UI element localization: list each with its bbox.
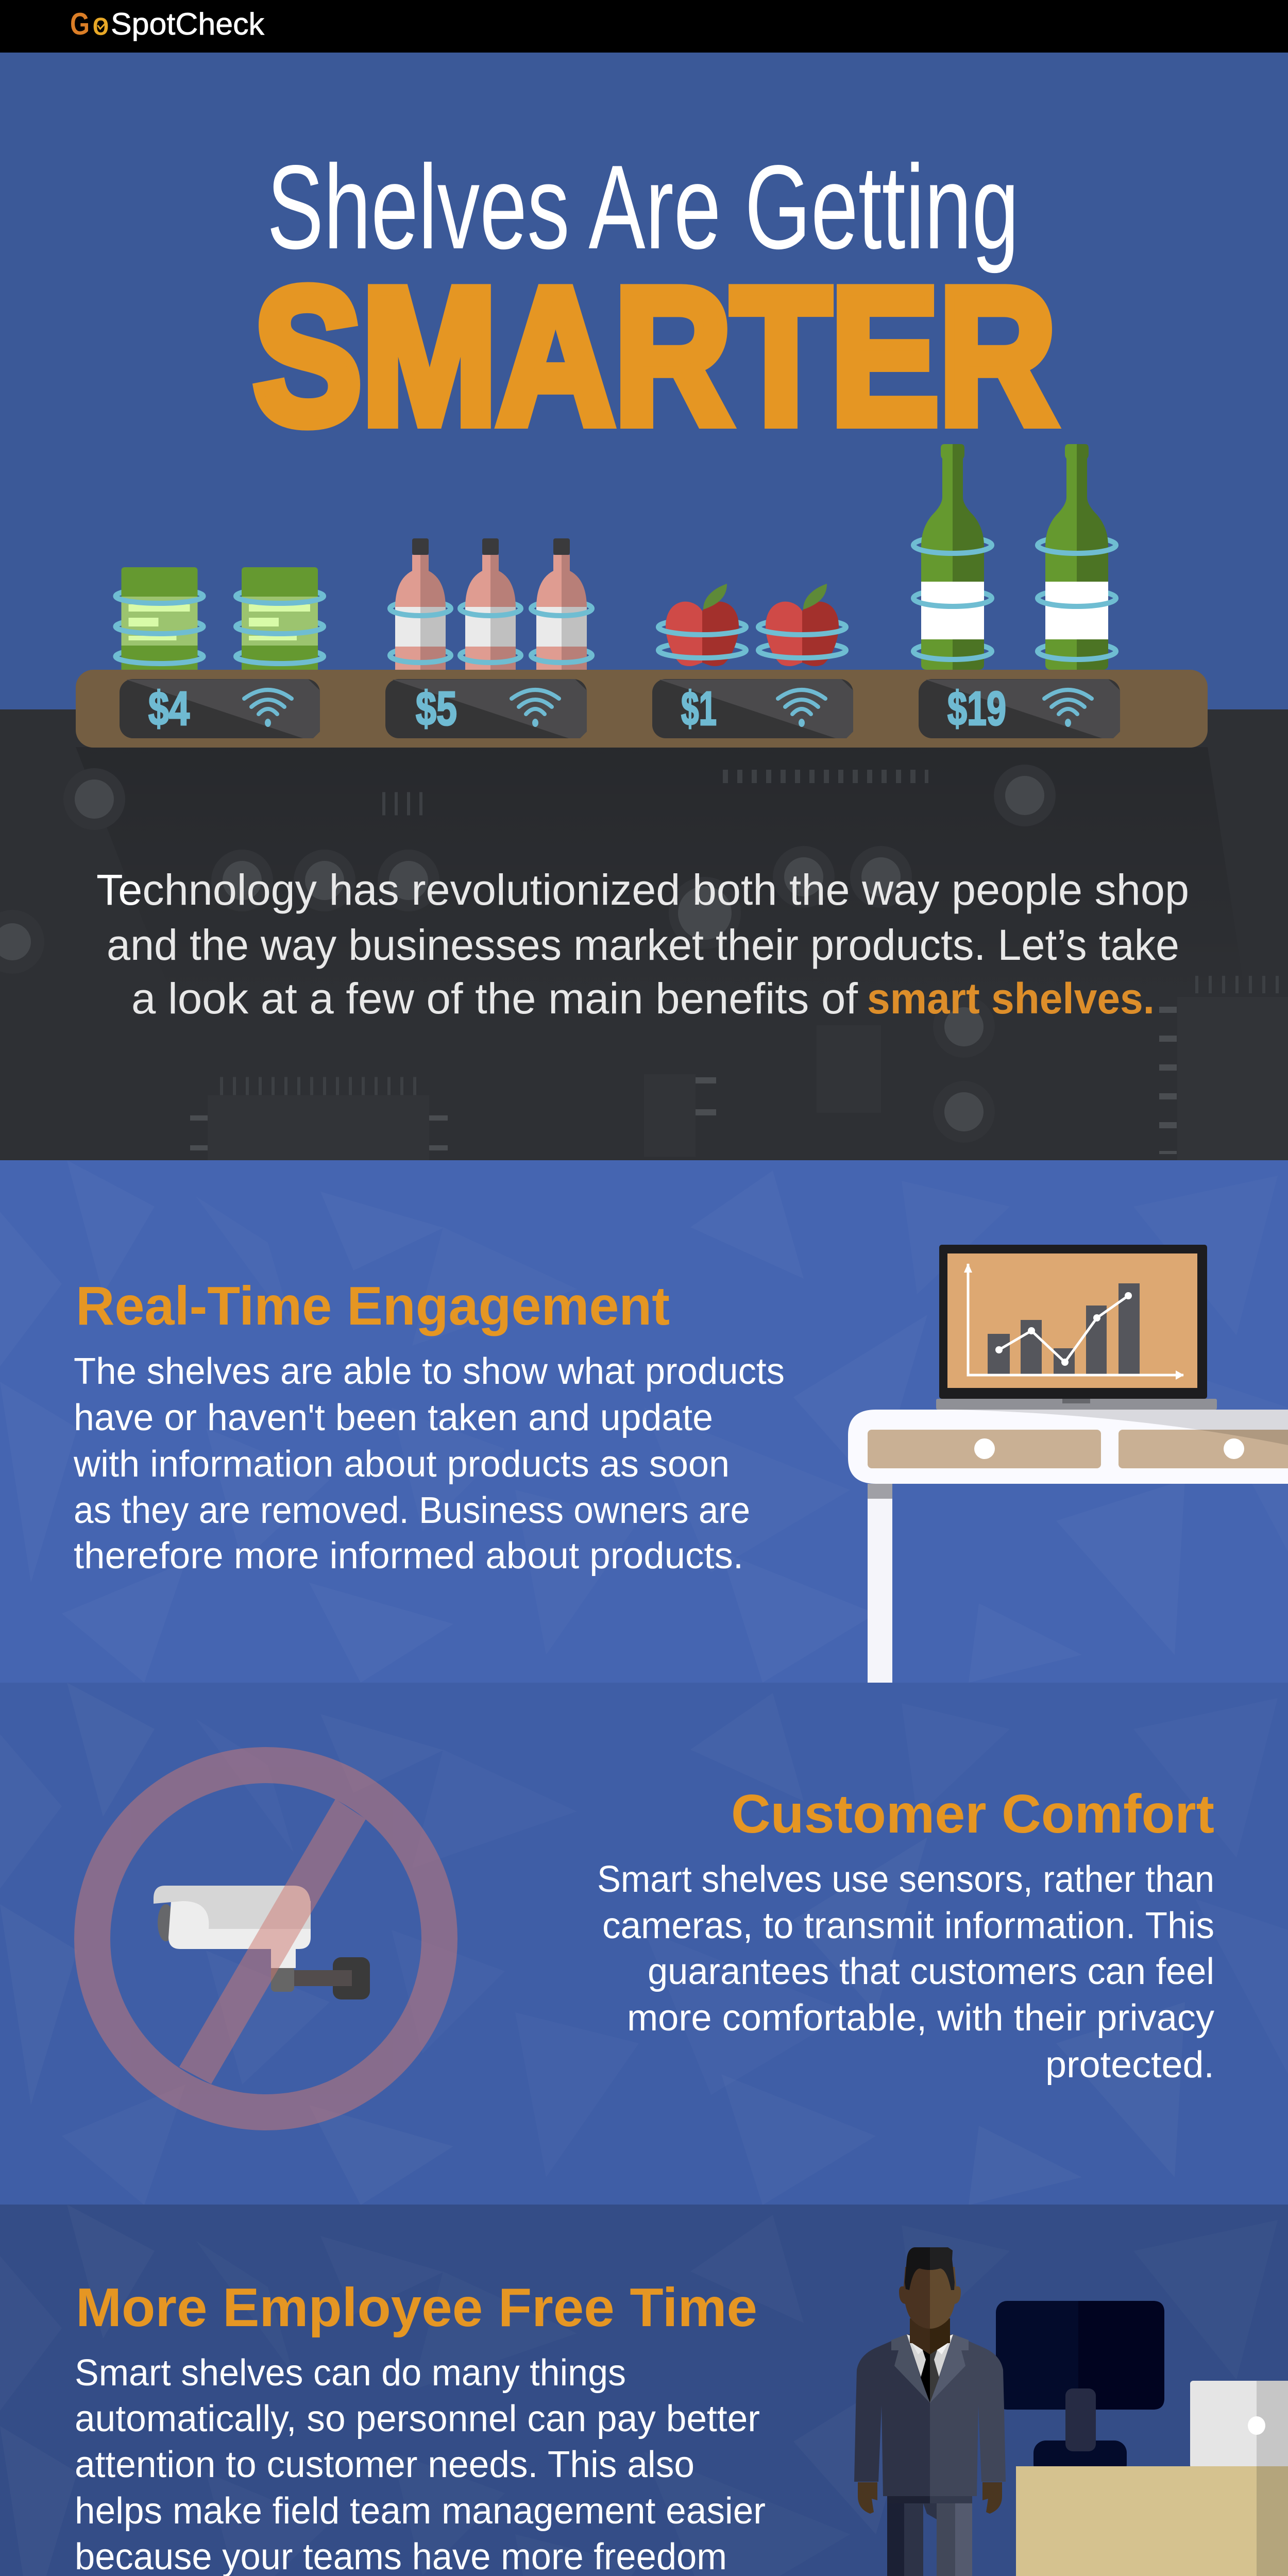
intro text: smart shelves. (867, 974, 1155, 1023)
price tag $1: $1 (681, 682, 717, 735)
product: pink bottles (390, 538, 592, 670)
price tag $19 (919, 679, 1120, 738)
body text: guarantees that customers can feel (648, 1951, 1214, 1992)
heading: More Employee Free Time (76, 2277, 757, 2338)
top bar (0, 0, 1288, 53)
body text: therefore more informed about products. (74, 1535, 743, 1577)
body text: cameras, to transmit information. This (602, 1905, 1214, 1946)
body text: with information about products as soon (73, 1444, 730, 1485)
illustration: laptop with chart (936, 1245, 1217, 1410)
product: wine bottles (913, 444, 1116, 670)
body text: have or haven't been taken and update (74, 1397, 713, 1438)
intro text: and the way businesses market their products. Let’s take (107, 921, 1179, 969)
price tag $19: $19 (947, 682, 1006, 735)
body text (73, 1351, 785, 1577)
panel: real-time engagement (0, 1160, 1288, 1683)
hero background (0, 53, 1288, 1160)
body text: Smart shelves use sensors, rather than (597, 1859, 1214, 1900)
intro text (96, 866, 1189, 1023)
body text (75, 2352, 766, 2576)
body text: attention to customer needs. This also (75, 2444, 694, 2485)
illustration: smart shelf with products (76, 444, 1208, 748)
product: green jars (115, 567, 324, 670)
body text: helps make field team management easier (75, 2490, 766, 2532)
logo: GoSpotCheck header: G (70, 7, 90, 41)
icon: prohibition sign (74, 1747, 457, 2130)
circuit decoration: hero (0, 747, 1288, 1160)
body text: as they are removed. Business owners are (74, 1490, 750, 1531)
illustration: desk and laptop (1016, 2381, 1288, 2576)
body text: more comfortable, with their privacy (627, 1997, 1214, 2039)
body text: The shelves are able to show what products (74, 1351, 785, 1392)
product: apples (658, 584, 846, 666)
price tag $5: $5 (416, 682, 457, 735)
title line 2: SMARTER: SMARTER (253, 248, 1056, 464)
price tag $5 (385, 679, 587, 738)
price tag $4: $4 (148, 682, 190, 735)
price tag $1 (652, 679, 853, 738)
body text: automatically, so personnel can pay better (75, 2398, 760, 2439)
body text: protected. (1045, 2044, 1214, 2086)
intro text: a look at a few of the main benefits of (131, 974, 858, 1023)
intro text: Technology has revolutionized both the way people shop (96, 866, 1189, 914)
illustration: businessman (854, 2247, 1006, 2576)
title (253, 141, 1056, 464)
price tag $4 (120, 679, 320, 738)
logo: GoSpotCheck header: o (93, 7, 109, 41)
shelf (76, 670, 1208, 748)
illustration: monitor (996, 2301, 1164, 2477)
panel: more employee free time (0, 2205, 1288, 2576)
body text: Smart shelves can do many things (75, 2352, 626, 2394)
heading: Customer Comfort (731, 1784, 1214, 1844)
panel: customer comfort (0, 1683, 1288, 2205)
heading: Real-Time Engagement (76, 1276, 670, 1336)
bar chart (964, 1263, 1184, 1380)
icon: security camera (154, 1886, 370, 1999)
body text (597, 1859, 1214, 2086)
logo: GoSpotCheck header: SpotCheck (111, 7, 265, 41)
illustration: table (848, 1410, 1288, 1683)
